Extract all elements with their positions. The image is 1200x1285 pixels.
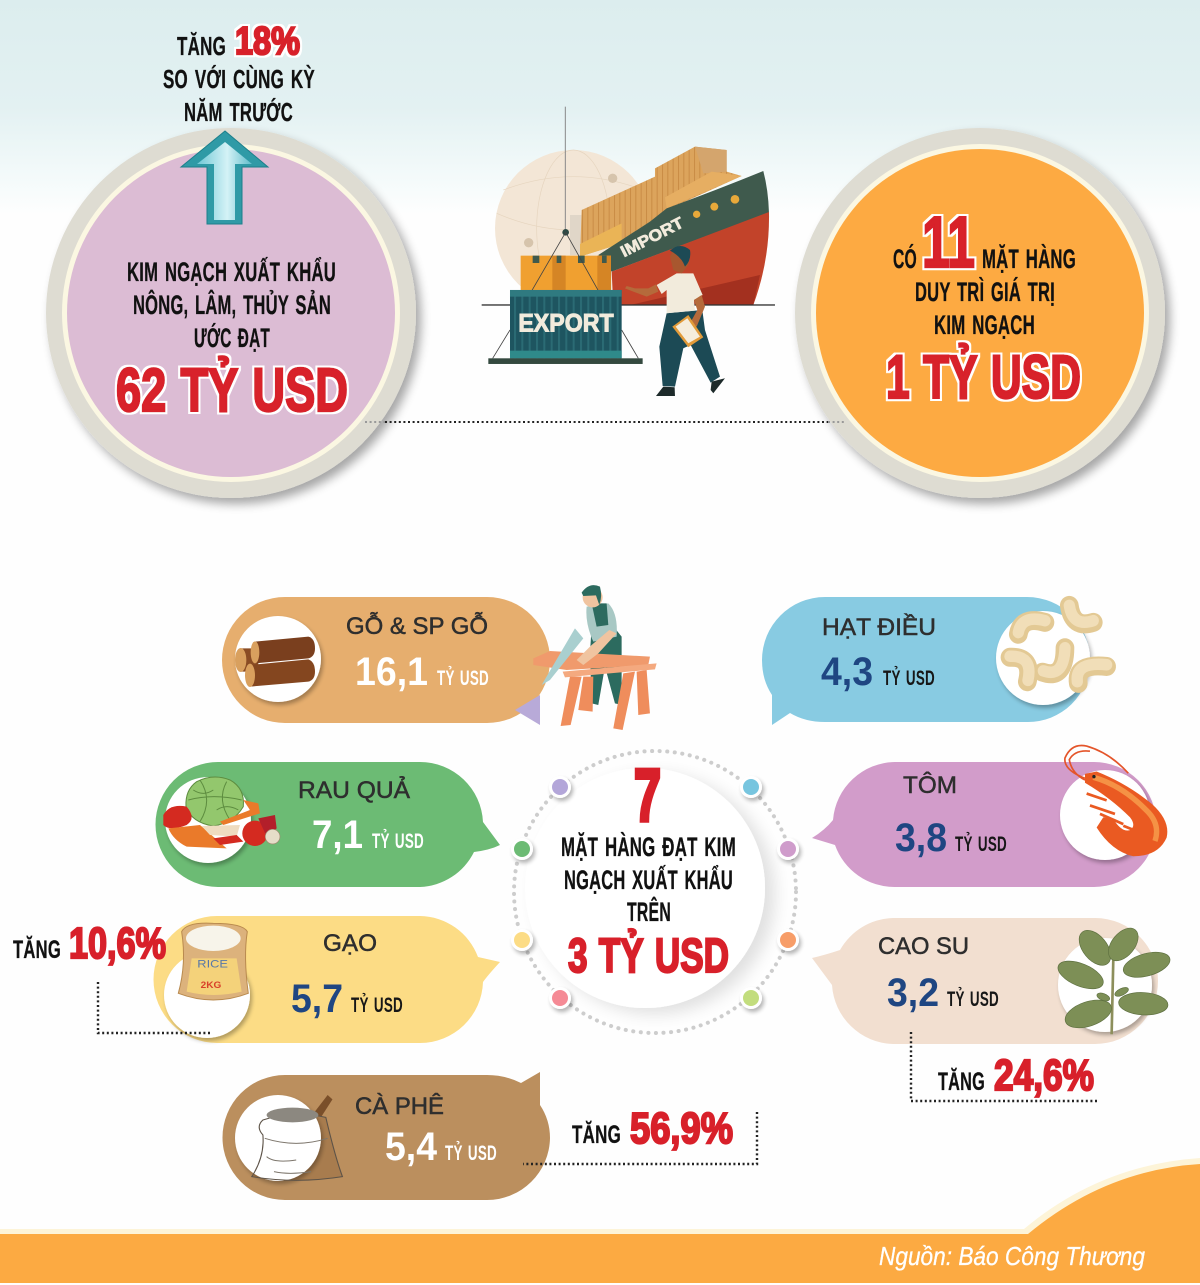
icon: logs [235,637,315,687]
text: center label: MẶT HÀNG ĐẠT KIM [561,831,736,862]
text: export label: ƯỚC ĐẠT [194,322,270,353]
value: rice: 5,7 [291,977,343,1021]
sky gradient [0,0,1200,215]
value: vegetables: 7,1 [312,813,363,857]
callout: coffee increase [523,1104,757,1164]
callout: rubber increase [911,1032,1098,1101]
icon: rice sack: RICE [197,958,228,970]
panel: shrimp [812,745,1167,887]
text: 11 items label: DUY TRÌ GIÁ TRỊ [915,276,1055,307]
text: 7: 7 [634,754,661,837]
value: coffee: 5,4 [385,1125,438,1169]
icon: up arrow [181,131,268,224]
text: 11 items label: KIM NGẠCH [934,310,1035,340]
icon: speech tail lavender [515,695,540,725]
callout: rice increase: 10,6% [69,919,166,968]
value: wood [355,650,489,694]
icon: cashews [1010,605,1107,683]
text: 11 items label [893,203,1076,340]
callout: rubber increase: TĂNG [938,1067,985,1096]
footer band [0,1158,1200,1283]
text: vegetables name: RAU QUẢ [298,775,410,804]
callout: rubber increase: 24,6% [994,1051,1094,1100]
value: 3 tỷ USD: 3 TỶ USD [568,928,729,983]
text: center label [561,831,736,927]
text: shrimp name: TÔM [903,771,957,799]
value: shrimp [895,816,1007,860]
icon: rice sack [178,923,248,1000]
panel: rice [154,916,500,1043]
illustration: export import ship: EXPORT [518,310,614,338]
value: coffee: TỶ USD [445,1142,497,1165]
illustration: carpenter [533,585,657,730]
illustration: export import ship: IMPORT [618,215,687,261]
panel: 11 items circle [795,128,1165,498]
panel: cashew [762,597,1107,725]
panel: rubber [812,918,1173,1044]
icon: coffee sack [235,1095,342,1181]
icon: rice sack: 2KG [201,980,221,990]
panel: export value circle [46,128,416,498]
value: cashew: 4,3 [821,650,873,694]
icon: shrimp [1065,745,1167,856]
text: wood name: GỖ & SP GỖ [346,611,488,640]
callout: increase 18%: 18% [235,20,300,63]
sub-illustration: worker [625,246,725,396]
value: rubber: 3,2 [887,971,939,1015]
text: 11 items label: MẶT HÀNG [982,243,1076,274]
icon: vegetables [163,777,280,848]
text: coffee name: CÀ PHÊ [355,1093,444,1120]
callout: coffee increase: 56,9% [630,1104,733,1153]
value: cashew [821,650,935,694]
icon: rubber leaves [1054,922,1173,1034]
illustration: export import ship [482,107,775,396]
panel: vegetables [156,762,500,887]
value: 62 tỷ USD: 62 TỶ USD [116,356,348,424]
value: wood: TỶ USD [437,667,489,690]
value: rice [291,977,403,1021]
text: 11 items label: 11 [922,203,975,283]
text: 11 items label: CÓ [893,243,917,274]
callout: rice increase: TĂNG [13,935,61,964]
text: export label: KIM NGẠCH XUẤT KHẨU [127,256,336,287]
callout: increase 18%: TĂNG [177,31,226,61]
callout: rice increase [13,919,212,1033]
panel: center 7 items [511,751,799,1033]
panel: wood [222,597,550,725]
value: shrimp: TỶ USD [955,833,1007,856]
value: 1 tỷ USD: 1 TỶ USD [886,343,1081,411]
text: center label: NGẠCH XUẤT KHẨU [564,864,733,895]
value: cashew: TỶ USD [883,667,935,690]
value: vegetables: TỶ USD [372,830,424,853]
callout: increase 18%: SO VỚI CÙNG KỲ [163,64,315,94]
panel: coffee [223,1072,550,1200]
value: rubber: TỶ USD [947,988,999,1011]
text: cashew name: HẠT ĐIỀU [822,613,936,641]
dotted connector between circles [365,421,846,423]
text: export label [127,256,336,353]
callout: increase 18%: NĂM TRƯỚC [184,97,293,127]
text: export label: NÔNG, LÂM, THỦY SẢN [133,288,331,320]
callout: coffee increase: TĂNG [572,1120,621,1149]
value: rubber [887,971,999,1015]
text: center label: TRÊN [627,896,671,927]
value: rice: TỶ USD [351,994,403,1017]
text: rice name: GẠO [323,930,377,957]
callout: increase 18% [163,20,315,127]
value: wood: 16,1 [355,650,428,694]
source text: Nguồn: Báo Công Thương [879,1241,1145,1271]
value: vegetables [312,813,424,857]
value: coffee [385,1125,497,1169]
value: shrimp: 3,8 [895,816,947,860]
text: rubber name: CAO SU [878,933,969,960]
